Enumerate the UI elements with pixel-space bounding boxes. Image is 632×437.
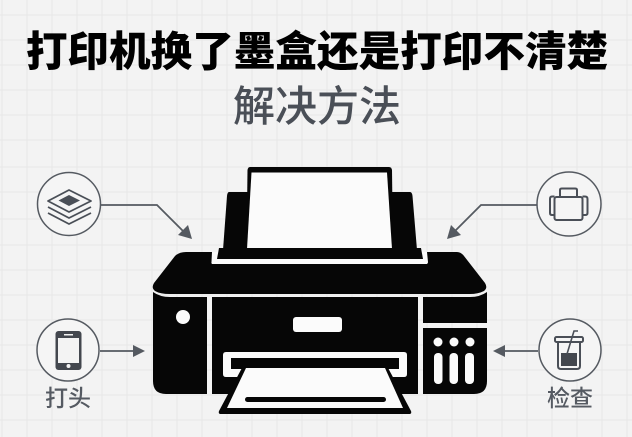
printer top cover	[153, 252, 486, 294]
upper right panel	[423, 292, 487, 323]
ink tank panel	[423, 328, 487, 394]
power button	[176, 310, 190, 324]
icon: ink cup	[539, 319, 601, 381]
output slot	[223, 352, 407, 377]
printer	[153, 167, 487, 414]
input paper sheet	[246, 167, 393, 252]
icon: paper stack	[38, 172, 100, 236]
printer body left panel	[153, 292, 207, 394]
ink tanks	[434, 338, 474, 384]
arrow: cartridge to printer	[447, 205, 537, 239]
arrow: phone to printer	[100, 345, 145, 357]
arrow: paper to printer	[101, 205, 192, 239]
label: print head: 打头	[45, 385, 91, 411]
display slot	[293, 317, 342, 332]
paper support	[223, 192, 417, 250]
title: 打印机换了墨盒还是打印不清楚	[26, 28, 608, 75]
paper base bar	[211, 249, 428, 264]
output paper tray	[219, 366, 411, 414]
icon: phone	[37, 319, 99, 381]
icon: ink cartridge	[537, 172, 601, 236]
printer body centre panel	[212, 297, 418, 394]
label: check: 检查	[547, 385, 593, 411]
arrow: cup to printer	[493, 345, 538, 357]
subtitle: 解决方法	[233, 83, 401, 130]
